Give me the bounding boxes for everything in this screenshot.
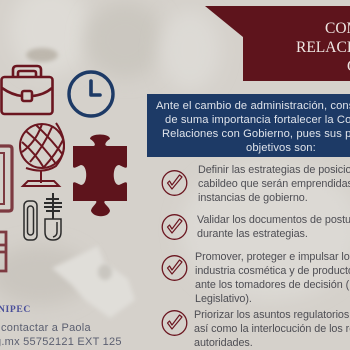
icon: partial framed shape bbox=[0, 146, 12, 211]
objective 4: autoridades. bbox=[194, 337, 253, 349]
objective 1: instancias de gobierno. bbox=[198, 192, 308, 204]
objective 3 bbox=[162, 251, 350, 305]
objective 1 bbox=[162, 164, 350, 204]
intro panel bbox=[147, 94, 350, 157]
objective 4: Priorizar los asuntos regulatorios, bbox=[194, 309, 350, 321]
objective 3: Legislativo). bbox=[195, 293, 252, 305]
contact block: contactar a Paola bbox=[1, 322, 91, 334]
icon: clock bbox=[69, 72, 113, 116]
objective 4 bbox=[162, 309, 350, 349]
contact block bbox=[0, 304, 122, 348]
title banner bbox=[205, 6, 350, 81]
intro panel: objetivos son: bbox=[246, 142, 316, 154]
icon: globe bbox=[20, 123, 64, 186]
objective 2 bbox=[162, 214, 350, 240]
icon: puzzle piece bbox=[73, 134, 127, 216]
icon: cosmetics bbox=[24, 193, 62, 240]
icon: partial lipstick bbox=[0, 232, 6, 271]
icon: briefcase bbox=[2, 66, 52, 114]
objective 2: durante las estrategias. bbox=[197, 228, 308, 240]
